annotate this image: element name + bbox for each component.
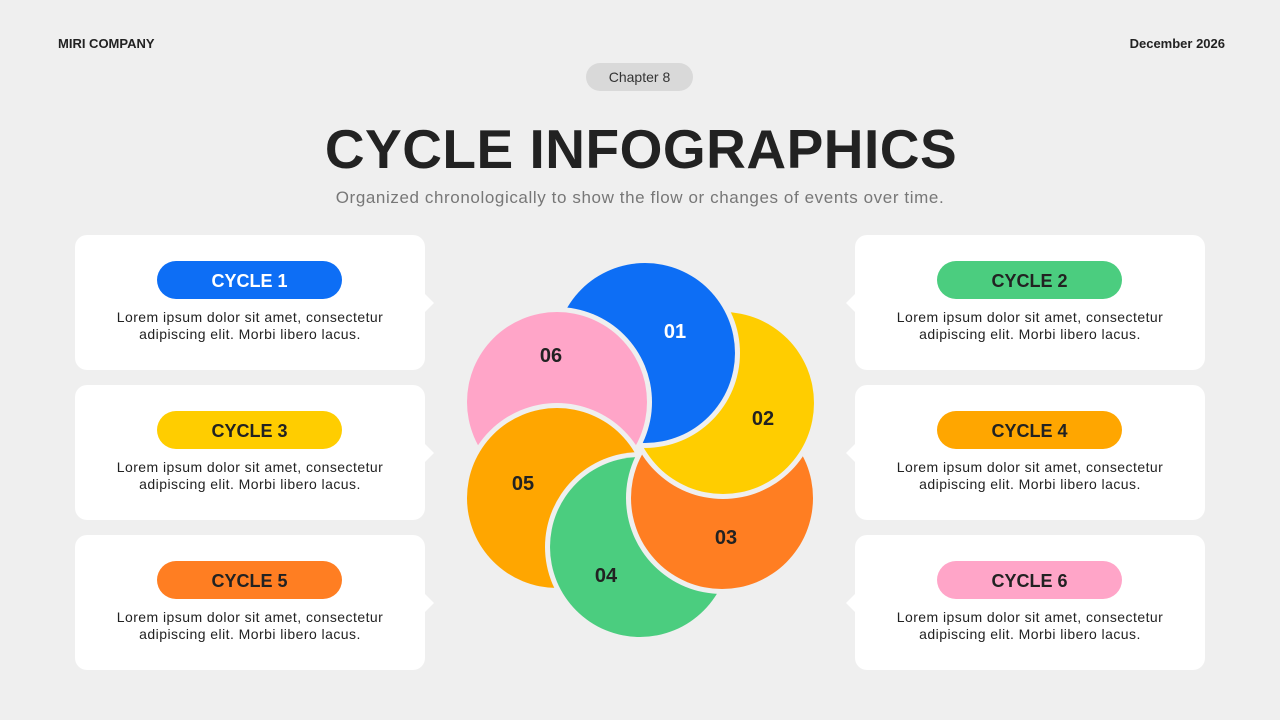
card: cycle 5: [75, 535, 425, 670]
segment 04: [550, 457, 730, 637]
card: cycle 4: Lorem ipsum dolor sit amet, consectetur: [897, 459, 1163, 475]
segment 05: 05: [512, 473, 534, 495]
card: cycle 2: adipiscing elit. Morbi libero lacus.: [919, 326, 1141, 342]
segment 05: [467, 408, 647, 588]
title: CYCLE INFOGRAPHICS: [325, 118, 957, 180]
card: cycle 1: adipiscing elit. Morbi libero lacus.: [139, 326, 361, 342]
card: cycle 5: CYCLE 5: [211, 571, 288, 591]
segment 01: [555, 263, 735, 443]
company name: MIRI COMPANY: [58, 36, 155, 51]
segment 02: [632, 312, 814, 494]
card: cycle 1: CYCLE 1: [211, 271, 288, 291]
card: cycle 2: Lorem ipsum dolor sit amet, consectetur: [897, 309, 1163, 325]
card: cycle 1: Lorem ipsum dolor sit amet, consectetur: [117, 309, 383, 325]
segment 03: [631, 454, 813, 589]
card: cycle 4: [855, 385, 1205, 520]
segment 03: 03: [715, 527, 737, 549]
card: cycle 3: adipiscing elit. Morbi libero lacus.: [139, 476, 361, 492]
segment 04: 04: [595, 565, 618, 587]
subtitle: Organized chronologically to show the flow or changes of events over time.: [336, 188, 944, 207]
card: cycle 3: CYCLE 3: [211, 421, 288, 441]
card: cycle 6: [855, 535, 1205, 670]
card: cycle 1: [75, 235, 425, 370]
card: cycle 3: [75, 385, 425, 520]
segment 02: 02: [752, 408, 774, 430]
card: cycle 6: Lorem ipsum dolor sit amet, consectetur: [897, 609, 1163, 625]
cycle diagram: [467, 263, 814, 637]
chapter pill: [586, 63, 693, 91]
card: cycle 3: Lorem ipsum dolor sit amet, consectetur: [117, 459, 383, 475]
card: cycle 6: CYCLE 6: [991, 571, 1068, 591]
segment 06: [467, 312, 647, 445]
chapter pill: Chapter 8: [609, 69, 670, 85]
card: cycle 2: [855, 235, 1205, 370]
card: cycle 2: CYCLE 2: [991, 271, 1068, 291]
segment 06: 06: [540, 345, 562, 367]
card: cycle 5: adipiscing elit. Morbi libero lacus.: [139, 626, 361, 642]
segment 01: 01: [664, 321, 686, 343]
card: cycle 6: adipiscing elit. Morbi libero lacus.: [919, 626, 1141, 642]
card: cycle 4: adipiscing elit. Morbi libero lacus.: [919, 476, 1141, 492]
date: December 2026: [1130, 36, 1225, 51]
card: cycle 5: Lorem ipsum dolor sit amet, consectetur: [117, 609, 383, 625]
card: cycle 4: CYCLE 4: [991, 421, 1068, 441]
